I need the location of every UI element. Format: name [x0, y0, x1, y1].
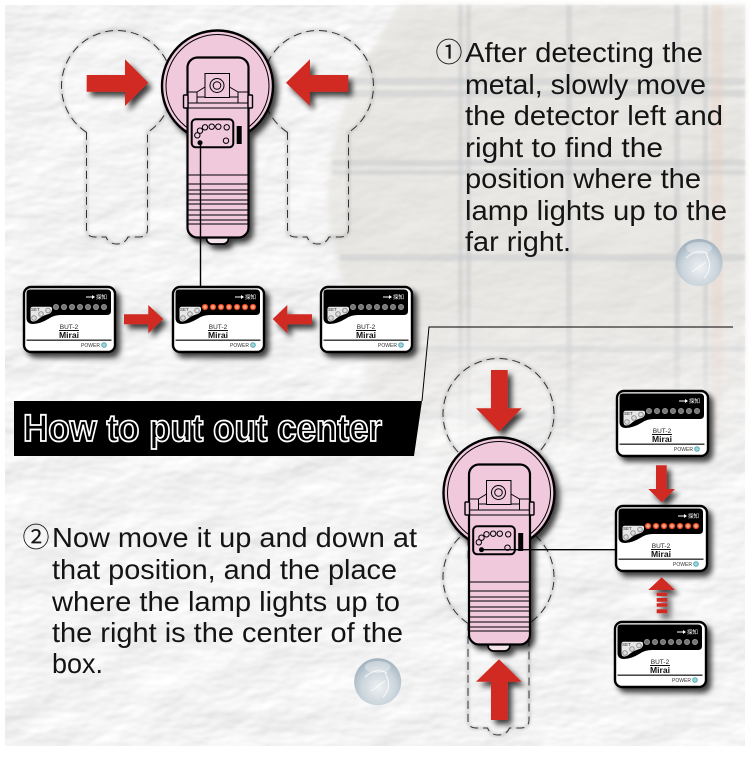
small arrow: to centre display from left	[124, 305, 163, 333]
arrow: move left	[286, 59, 348, 106]
display: row centre, lamp lit: 探知	[245, 293, 256, 301]
dashed outline: left position	[62, 31, 173, 244]
step 1 text: the detector left and	[465, 100, 723, 131]
display: row left, lamp off: SET	[31, 307, 40, 312]
display: row right, lamp off: POWER	[378, 343, 397, 349]
step 1 text: ①	[436, 31, 462, 70]
detector: centre position, bottom	[444, 438, 554, 651]
step 1 text: far right.	[465, 226, 571, 257]
display: column middle, lamp lit: SET	[623, 526, 632, 531]
step 1 text: position where the	[465, 163, 701, 194]
display: column bottom, lamp off: SET	[622, 642, 631, 647]
connector line: detector lamp to display	[482, 549, 615, 551]
arrow: move down	[476, 370, 522, 432]
heading text: How to put out center	[23, 408, 382, 450]
step 1 text	[436, 31, 727, 257]
step 2 text: that position, and the place	[52, 554, 397, 585]
display: row right, lamp off: BUT-2	[357, 324, 376, 331]
display: row centre, lamp lit: Mirai	[208, 331, 228, 340]
display: column bottom, lamp off	[615, 622, 706, 687]
display: column top, lamp off: 探知	[689, 397, 700, 405]
display: column middle, lamp lit: 探知	[688, 512, 699, 520]
dashed outline: lower position	[443, 522, 554, 735]
rebar photo background	[328, 5, 745, 470]
display: row left, lamp off: BUT-2	[60, 324, 79, 331]
display: column middle, lamp lit: Mirai	[651, 550, 671, 559]
display: column top, lamp off: SET	[624, 411, 633, 416]
display: row left, lamp off	[24, 287, 115, 352]
arrow: move right	[87, 59, 148, 106]
display: row right, lamp off: SET	[328, 307, 337, 312]
display: row left, lamp off: 探知	[96, 293, 107, 301]
display: row centre, lamp lit	[173, 287, 264, 352]
display: column middle, lamp lit: POWER	[673, 562, 692, 568]
step 2 text: where the lamp lights up to	[51, 586, 400, 617]
step 1 text: After detecting the	[465, 37, 703, 68]
display: column top, lamp off: POWER	[674, 447, 693, 453]
display: row right, lamp off: Mirai	[356, 331, 376, 340]
display: row left, lamp off: Mirai	[59, 331, 79, 340]
display: row centre, lamp lit: BUT-2	[209, 324, 228, 331]
step 2 text: the right is the center of the	[52, 617, 403, 648]
display: row centre, lamp lit: POWER	[230, 343, 249, 349]
connector line: detector lamp to centre display	[200, 142, 202, 287]
display: row right, lamp off: 探知	[393, 293, 404, 301]
display: column bottom, lamp off: POWER	[672, 678, 691, 684]
display: row right, lamp off	[321, 287, 412, 352]
dashed outline: upper position	[443, 359, 554, 572]
arrow: move up	[476, 659, 522, 720]
display: column top, lamp off: Mirai	[652, 435, 672, 444]
display: column bottom, lamp off: 探知	[687, 628, 698, 636]
detector: centre position, top	[162, 30, 273, 244]
small arrow: down to middle display	[648, 465, 675, 502]
display: column bottom, lamp off: Mirai	[650, 666, 670, 675]
display: column top, lamp off: BUT-2	[653, 428, 672, 435]
display: column bottom, lamp off: BUT-2	[651, 659, 670, 666]
display: row left, lamp off: POWER	[81, 343, 100, 349]
display: column middle, lamp lit: BUT-2	[652, 543, 671, 550]
small arrow: to centre display from right	[273, 305, 312, 333]
display: column top, lamp off	[617, 391, 708, 456]
step 2 text: ②	[22, 516, 50, 555]
small striped arrow: up to middle display	[648, 577, 675, 613]
step 2 text: Now move it up and down at	[52, 522, 417, 553]
marble decoration: step 2	[354, 658, 401, 705]
marble decoration: step 1	[676, 239, 722, 286]
step 1 text: metal, slowly move	[465, 69, 706, 100]
step 1 text: lamp lights up to the	[465, 195, 727, 226]
step 2 text: box.	[52, 648, 103, 679]
display: column middle, lamp lit	[616, 506, 707, 571]
heading banner	[14, 401, 422, 456]
leader line from banner	[422, 327, 733, 401]
display: row centre, lamp lit: SET	[180, 307, 189, 312]
step 2 text	[22, 516, 417, 679]
dashed outline: right position	[262, 31, 374, 244]
step 1 text: right to find the	[465, 132, 663, 163]
